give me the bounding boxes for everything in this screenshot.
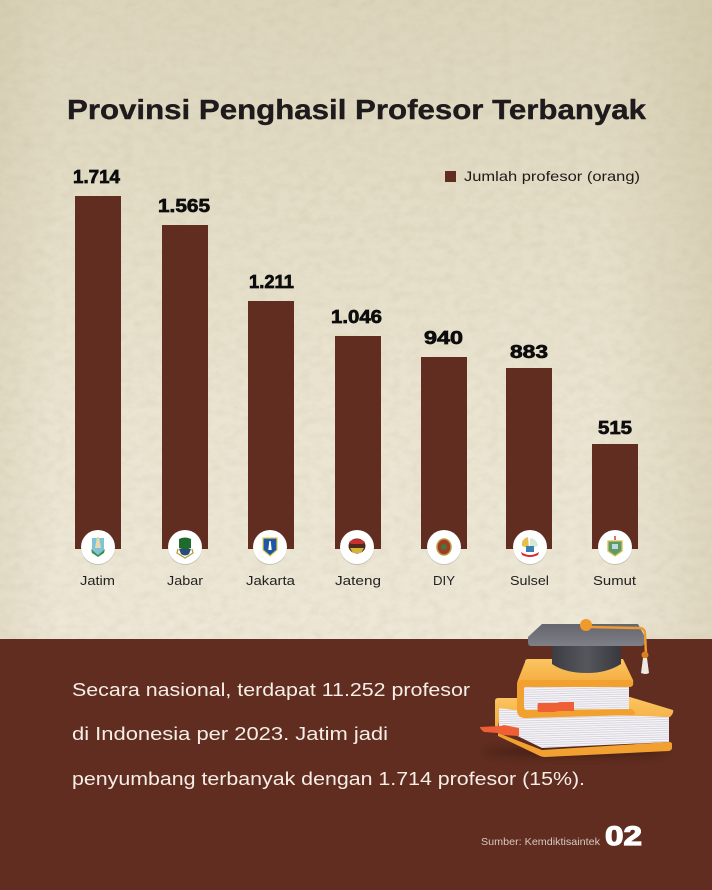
legend: Jumlah profesor (orang) [464, 168, 640, 184]
bar: Jabar [158, 196, 210, 588]
bar: DIY: DIY [433, 573, 455, 588]
bar: Jatim: 1.714 [73, 167, 120, 187]
bar: Jateng: 1.046 [331, 307, 382, 327]
bar: Sumut: 515 [598, 418, 632, 438]
bar: DIY: 940 [424, 328, 463, 348]
bar: Jakarta: Jakarta [246, 573, 296, 588]
bar chart [73, 167, 638, 588]
bar: Jateng: Jateng [335, 573, 381, 588]
title: Provinsi Penghasil Profesor Terbanyak [67, 94, 646, 125]
bar: Sumut: Sumut [593, 573, 636, 588]
summary text: penyumbang terbanyak dengan 1.714 profesor (15%). [72, 769, 585, 789]
bar: Jabar: Jabar [167, 573, 204, 588]
bar: Jatim: Jatim [80, 573, 115, 588]
lower bookmark [480, 725, 519, 736]
bar: Jakarta: 1.211 [249, 272, 294, 292]
bar: Sulsel: Sulsel [510, 573, 549, 588]
summary text: di Indonesia per 2023. Jatim jadi [72, 724, 388, 744]
bar: Jateng [331, 307, 382, 588]
bar: DIY [421, 328, 467, 588]
paper background [0, 0, 712, 640]
lower book [495, 697, 673, 757]
upper bookmark [538, 702, 574, 712]
source: Sumber: Kemdiktisaintek [481, 836, 601, 848]
upper book [517, 659, 635, 718]
bar: Sulsel: 883 [510, 342, 548, 362]
bar: Jakarta [246, 272, 296, 588]
bar: Jatim [73, 167, 121, 588]
summary text [72, 680, 585, 789]
panel: bottom summary [0, 639, 712, 890]
graduation cap [528, 619, 649, 674]
summary text: Secara nasional, terdapat 11.252 profesor [72, 680, 470, 700]
bar: Sulsel [506, 342, 552, 588]
page number: 02 [605, 821, 642, 851]
icon: books and graduation cap [480, 619, 673, 757]
bar: Jabar: 1.565 [158, 196, 210, 216]
bar: Sumut [592, 418, 638, 588]
